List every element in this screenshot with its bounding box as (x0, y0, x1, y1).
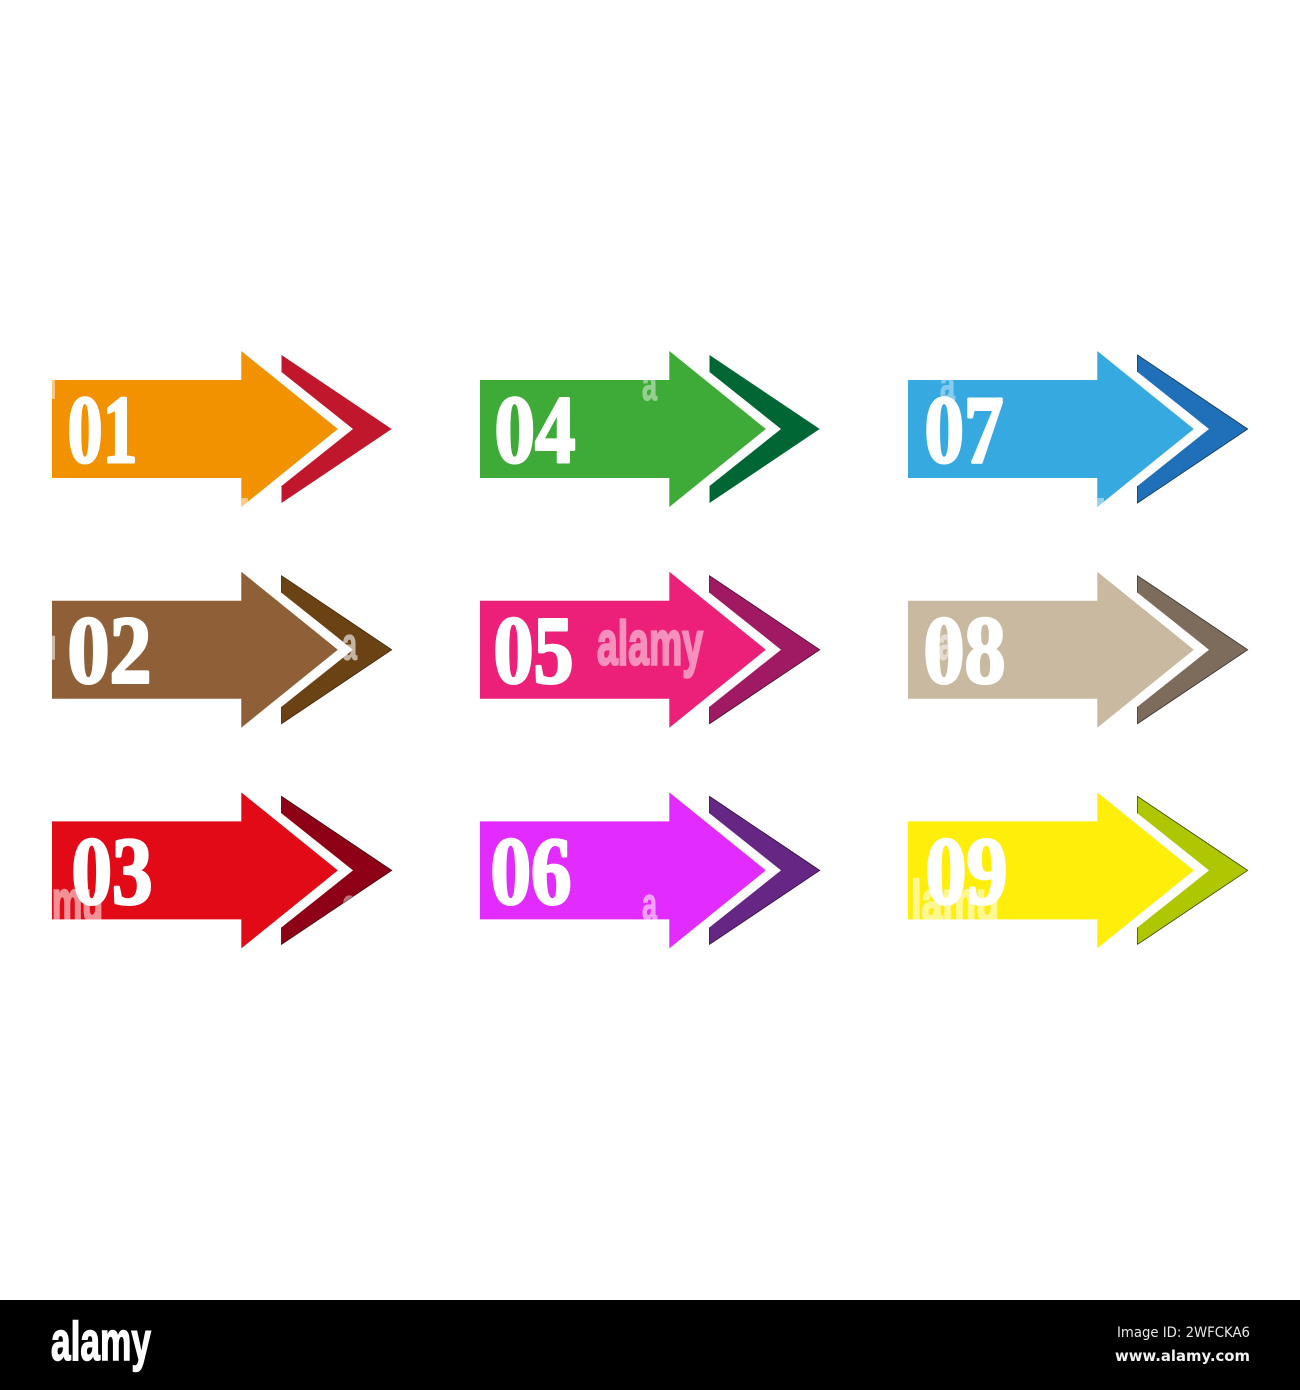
arrow 05 pink: 05 (494, 597, 574, 704)
arrow 08 tan: 08 (924, 597, 1006, 704)
arrow 08 tan (908, 572, 1248, 728)
arrow 05 pink (480, 572, 820, 728)
arrow 07 blue (908, 351, 1248, 507)
arrow 02 brown (52, 572, 392, 728)
arrow 04 green: 04 (494, 376, 576, 483)
arrow 03 red: a (342, 879, 358, 930)
arrow 07 blue: 07 (924, 376, 1004, 483)
arrow 02 brown: a (342, 619, 358, 670)
arrow 03 red (52, 792, 392, 948)
arrow 02 brown: 02 (68, 597, 152, 704)
arrow 06 magenta (480, 792, 820, 948)
arrow 03 red: mu (52, 869, 103, 934)
image id: Image ID: 2WFCKA6 (1117, 1325, 1250, 1341)
arrow 09 yellow (908, 792, 1248, 948)
arrow 06 magenta: 06 (490, 817, 572, 924)
arrow 04 green: a (642, 359, 658, 410)
arrow 09 yellow: lamu (911, 869, 999, 934)
arrow 06 magenta: a (642, 878, 658, 929)
arrow 03 red: 03 (72, 817, 152, 924)
footer logo: alamy (51, 1310, 151, 1372)
website: www.alamy.com (1115, 1347, 1250, 1365)
arrow 09 yellow: 09 (926, 817, 1008, 924)
arrow 01 orange (52, 351, 392, 507)
arrow 04 green (480, 351, 820, 507)
arrow 05 pink: alamy (597, 610, 703, 679)
arrow 08 tan: a (938, 619, 954, 670)
arrow 07 blue: a (940, 359, 956, 410)
arrow 01 orange: 01 (68, 376, 138, 483)
footer bar (0, 1300, 1300, 1390)
